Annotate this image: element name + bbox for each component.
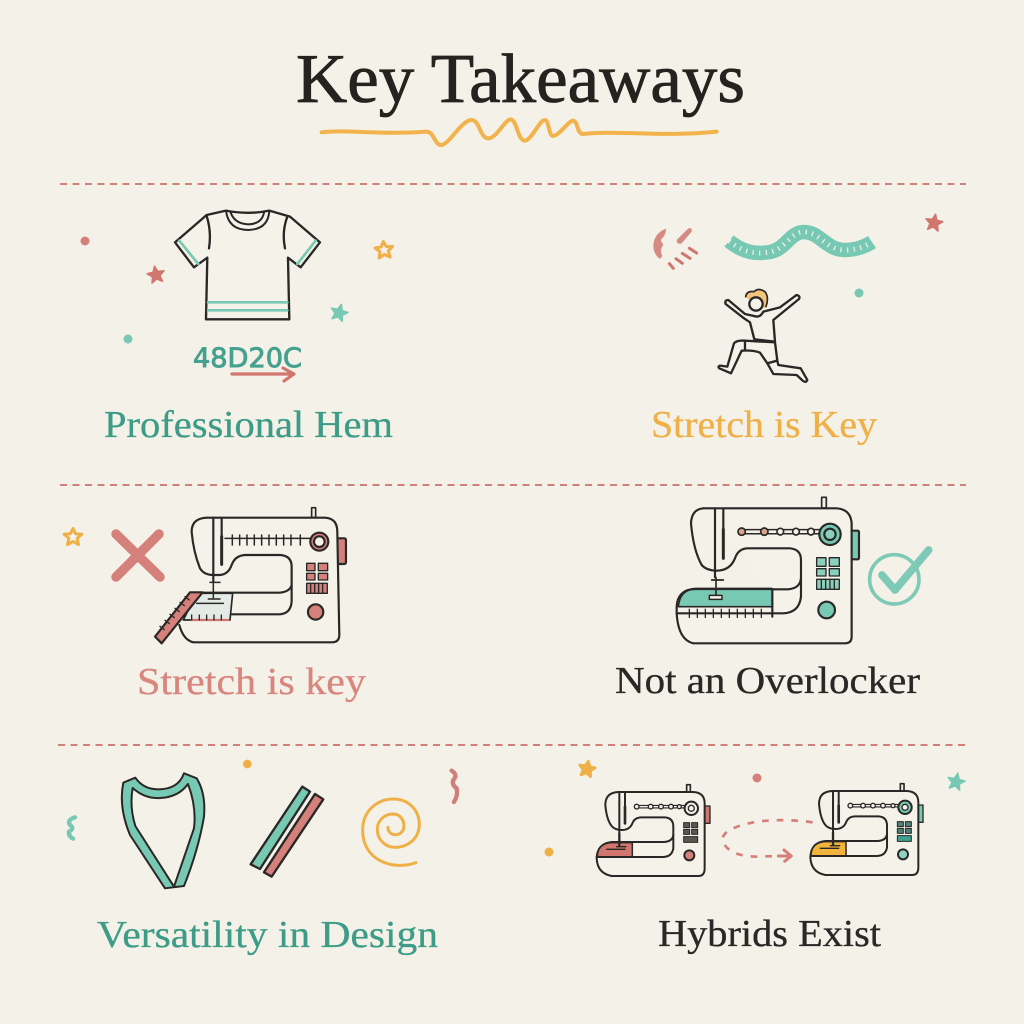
icon: measuring tape [729, 232, 872, 253]
panel: stretch is key [651, 213, 944, 446]
icon: gold sewing machine [810, 784, 923, 875]
icon: leaping figure [718, 289, 807, 382]
icon: t-shirt [175, 211, 320, 319]
heading: stretch is key: Stretch is key [137, 661, 366, 703]
decorative star and dot [854, 213, 944, 298]
panel: hybrids exist [544, 760, 966, 955]
panel: not an overlocker [615, 497, 929, 702]
decorative stars and dots [544, 760, 966, 856]
panel: professional hem [80, 211, 393, 446]
heading: versatility in design: Versatility in Design [97, 914, 438, 956]
arrow: dashed transition [723, 820, 813, 861]
icon: coral sewing machine [597, 785, 710, 876]
icon: stretch marks [653, 228, 697, 268]
panel: stretch is key warning [64, 508, 366, 703]
icon: sewing machine with teal bed [677, 497, 859, 643]
title: Key Takeaways [296, 41, 745, 118]
icon: spiral [363, 799, 419, 865]
panel: versatility in design [69, 760, 457, 956]
code label: 48D20C [193, 343, 302, 374]
icon: sewing machine with coral trim [155, 508, 346, 643]
decorative squiggles and dot [69, 760, 457, 839]
icon: check mark [870, 550, 929, 604]
icon: bound neckline [122, 773, 204, 888]
heading: professional hem: Professional Hem [104, 404, 393, 446]
arrow: hem direction [232, 368, 294, 381]
icon: gold star [64, 528, 82, 545]
decorative stars and dots [80, 236, 393, 344]
icon: binding strips [251, 787, 323, 877]
heading: stretch is key: Stretch is Key [651, 404, 877, 446]
heading: hybrids exist: Hybrids Exist [658, 913, 881, 955]
title squiggle underline [322, 119, 717, 145]
icon: red cross [116, 534, 160, 577]
heading: not an overlocker: Not an Overlocker [615, 660, 920, 702]
